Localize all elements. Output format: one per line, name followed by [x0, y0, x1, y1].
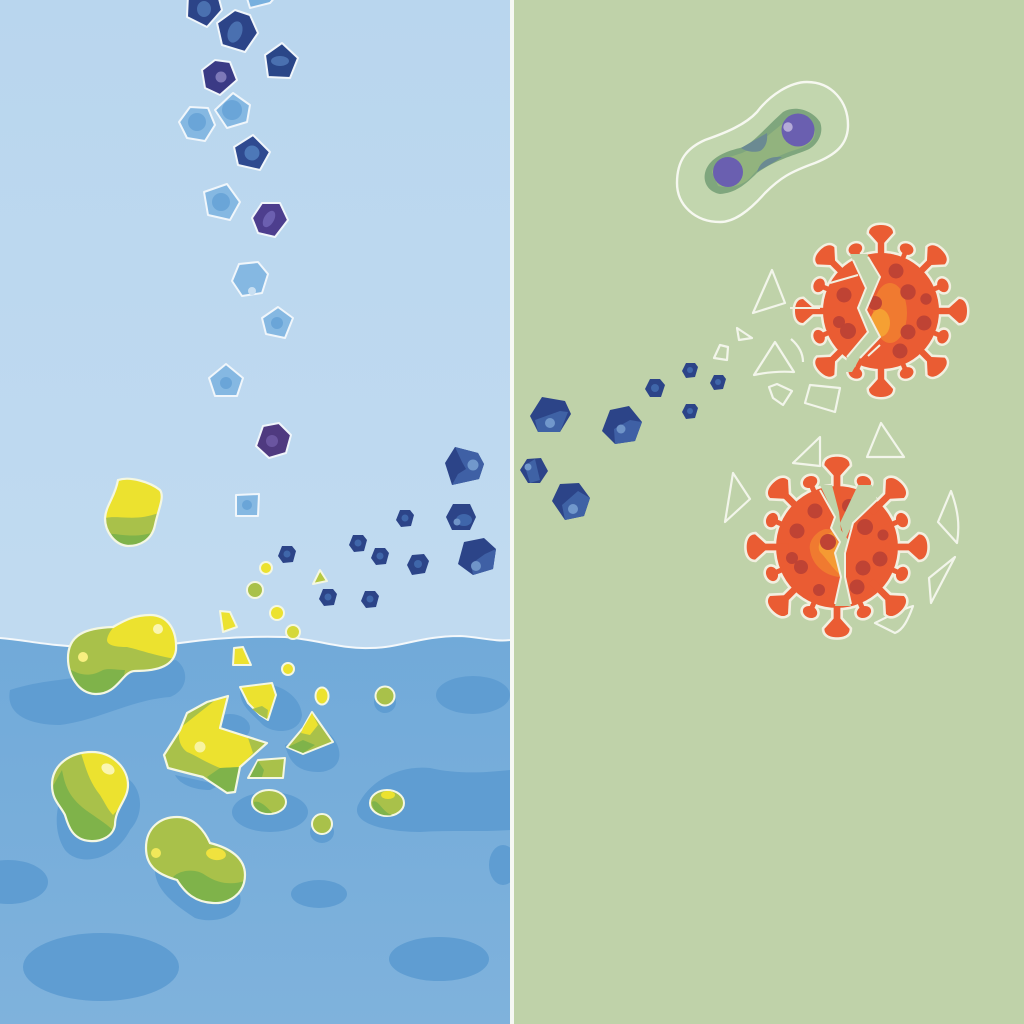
blob: broken central	[162, 694, 268, 794]
shard	[252, 790, 286, 814]
shard	[233, 647, 251, 665]
shard pieces	[220, 562, 404, 834]
particle	[682, 404, 698, 419]
hexagon particle	[187, 0, 222, 27]
purple particle	[252, 203, 288, 237]
panel: green background	[514, 0, 1024, 1024]
blob: yellow-green top left	[66, 614, 178, 696]
particle	[710, 375, 726, 390]
particle	[349, 535, 367, 552]
hexagon particle	[217, 10, 258, 52]
shard	[287, 712, 333, 754]
droplet	[247, 582, 263, 598]
panel divider	[510, 0, 514, 1024]
droplet	[260, 562, 272, 574]
particle	[446, 504, 476, 530]
particle	[396, 510, 414, 527]
falling particle stream	[179, 0, 298, 516]
blob: bottom green	[144, 816, 246, 904]
blob: yellow floating	[104, 478, 163, 548]
particle	[361, 591, 379, 608]
particle	[319, 589, 337, 606]
light particle	[246, 0, 277, 8]
purple particle	[202, 60, 237, 95]
droplet	[270, 606, 284, 620]
particle	[520, 458, 548, 483]
light particle	[179, 107, 215, 141]
particle	[445, 447, 484, 485]
water surface line	[0, 636, 510, 648]
particle	[458, 538, 496, 575]
light particle	[262, 307, 293, 338]
glass shards around lower virus	[725, 423, 958, 633]
virus lower, cracked	[747, 457, 927, 637]
cell: bacterium with capsule	[677, 82, 848, 222]
droplet	[316, 688, 328, 704]
shard	[313, 570, 327, 584]
particle	[530, 397, 571, 432]
glass shards around upper virus	[714, 270, 840, 412]
blob: lower left	[50, 750, 130, 842]
particle	[407, 554, 429, 575]
light particle	[204, 184, 240, 220]
shard	[248, 758, 285, 778]
particle	[602, 406, 642, 444]
dark particles drifting right, right panel	[520, 363, 726, 520]
particle	[682, 363, 698, 378]
droplet	[376, 686, 394, 706]
light particle	[232, 262, 268, 296]
pentagon particle	[265, 43, 298, 78]
panel: sky background	[0, 0, 510, 1024]
virus upper, cracked	[790, 225, 967, 397]
particle	[645, 379, 665, 397]
droplet	[282, 663, 294, 675]
light particle	[209, 364, 243, 396]
light particle	[236, 494, 259, 516]
droplet	[286, 625, 300, 639]
particle	[371, 548, 389, 565]
particle	[552, 483, 590, 520]
water shadows	[0, 660, 517, 1001]
dark particles drifting right, left panel	[278, 447, 496, 608]
shard	[220, 611, 237, 632]
droplet	[312, 814, 332, 834]
hexagon particle	[234, 135, 270, 170]
droplet	[370, 790, 404, 816]
particle	[278, 546, 296, 563]
light particle	[215, 93, 250, 128]
shard	[240, 683, 276, 720]
panel: water	[0, 636, 510, 1024]
purple particle	[256, 423, 291, 458]
